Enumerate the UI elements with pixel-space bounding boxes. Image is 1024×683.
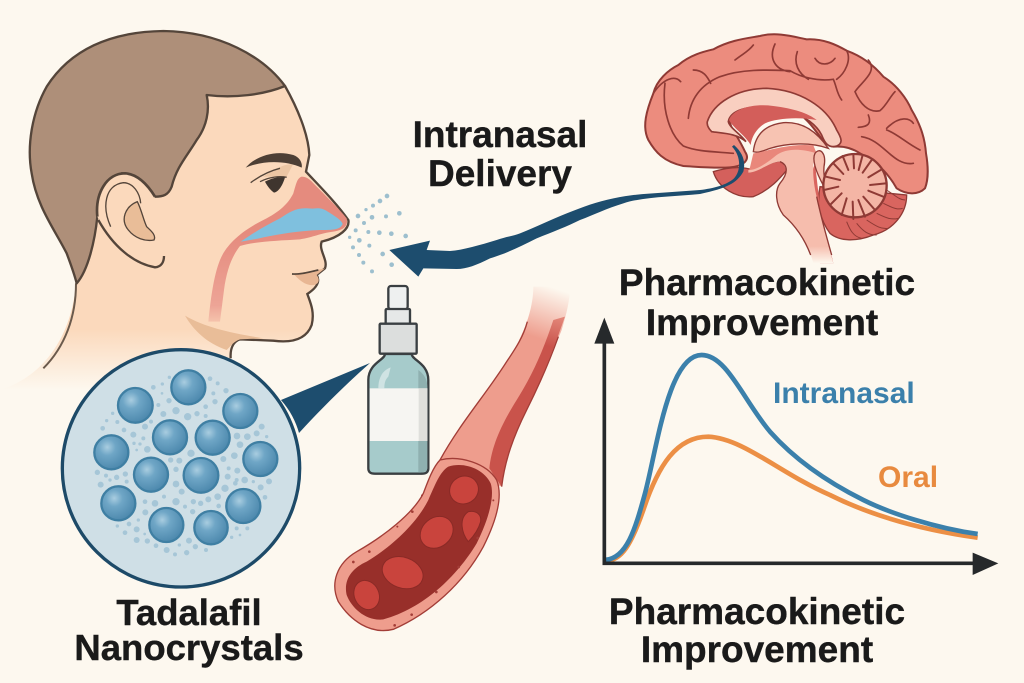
- callout wedge: [281, 363, 370, 433]
- heading: Pharmacokinetic Improvement upper: Improvement: [646, 302, 878, 343]
- x axis arrowhead: [973, 553, 998, 575]
- red blood cells: [349, 471, 484, 614]
- nasal cavity: [208, 177, 347, 322]
- vessel dark side: [489, 317, 565, 487]
- intranasal curve: [605, 355, 978, 560]
- back of neck outline: [43, 283, 76, 368]
- oral curve: [605, 437, 978, 561]
- large nanocrystals: [94, 370, 277, 544]
- eye: [251, 164, 293, 193]
- heading: Tadalafil Nanocrystals: Tadalafil: [116, 592, 262, 633]
- head profile illustration: [0, 31, 349, 390]
- axes: [604, 343, 977, 563]
- nanocrystal magnified circle: [62, 350, 300, 587]
- ear: [97, 173, 164, 267]
- cerebellum folds: [847, 190, 905, 238]
- y axis arrowhead: [594, 318, 614, 344]
- heading: Pharmacokinetic Improvement lower: Pharmacokinetic: [609, 591, 905, 632]
- blood vessel: [335, 287, 570, 631]
- thalamus arc: [753, 123, 828, 152]
- cerebellum arbor: [814, 151, 887, 219]
- heading: Intranasal Delivery: Intranasal: [413, 114, 587, 155]
- inner ventricle: [729, 105, 817, 145]
- bottle label: [370, 388, 427, 441]
- bottle tip: [388, 286, 408, 309]
- bottle cap: [380, 324, 417, 354]
- vessel cut section: [335, 459, 499, 631]
- heading: Pharmacokinetic Improvement upper: Pharmacokinetic: [619, 262, 915, 303]
- pharmacokinetic chart: [594, 318, 998, 575]
- bottle right shade: [418, 370, 427, 473]
- wall dots: [352, 494, 494, 627]
- gyri folds: [653, 44, 920, 164]
- face and neck: [0, 86, 349, 390]
- eyebrow: [246, 153, 302, 168]
- bottle collar: [386, 309, 410, 324]
- bottle highlight: [378, 367, 391, 388]
- delivery arrow from brain to nose: [389, 145, 744, 277]
- label shade: [419, 388, 427, 441]
- hair: [30, 31, 285, 283]
- lips: [292, 268, 325, 285]
- cortex: [645, 34, 928, 193]
- nasal spray bottle: [368, 286, 428, 474]
- heading: Tadalafil Nanocrystals: Nanocrystals: [74, 627, 304, 668]
- vessel lumen: [346, 465, 492, 620]
- vessel outline: [440, 322, 558, 487]
- jaw shadow: [185, 316, 263, 350]
- heading: Intranasal Delivery: Delivery: [428, 153, 572, 194]
- vessel tube: [440, 287, 570, 487]
- cerebellum base: [819, 187, 907, 240]
- hypothalamus: [713, 161, 788, 197]
- heading: Pharmacokinetic Improvement lower: Improvement: [641, 629, 873, 670]
- face outline: [231, 86, 349, 358]
- bottle body: [368, 354, 428, 474]
- small particles: [95, 376, 272, 556]
- spinal strip: [807, 163, 833, 263]
- brainstem: [748, 149, 833, 263]
- chart label: Oral: Oral: [878, 461, 938, 494]
- spray droplets: [348, 194, 408, 273]
- chart label: Intranasal: Intranasal: [773, 377, 915, 410]
- thalamus core: [749, 145, 817, 170]
- corpus callosum: [707, 88, 841, 147]
- lens: [62, 350, 300, 587]
- nasal mucosa: [241, 208, 343, 242]
- brain illustration: [645, 34, 928, 263]
